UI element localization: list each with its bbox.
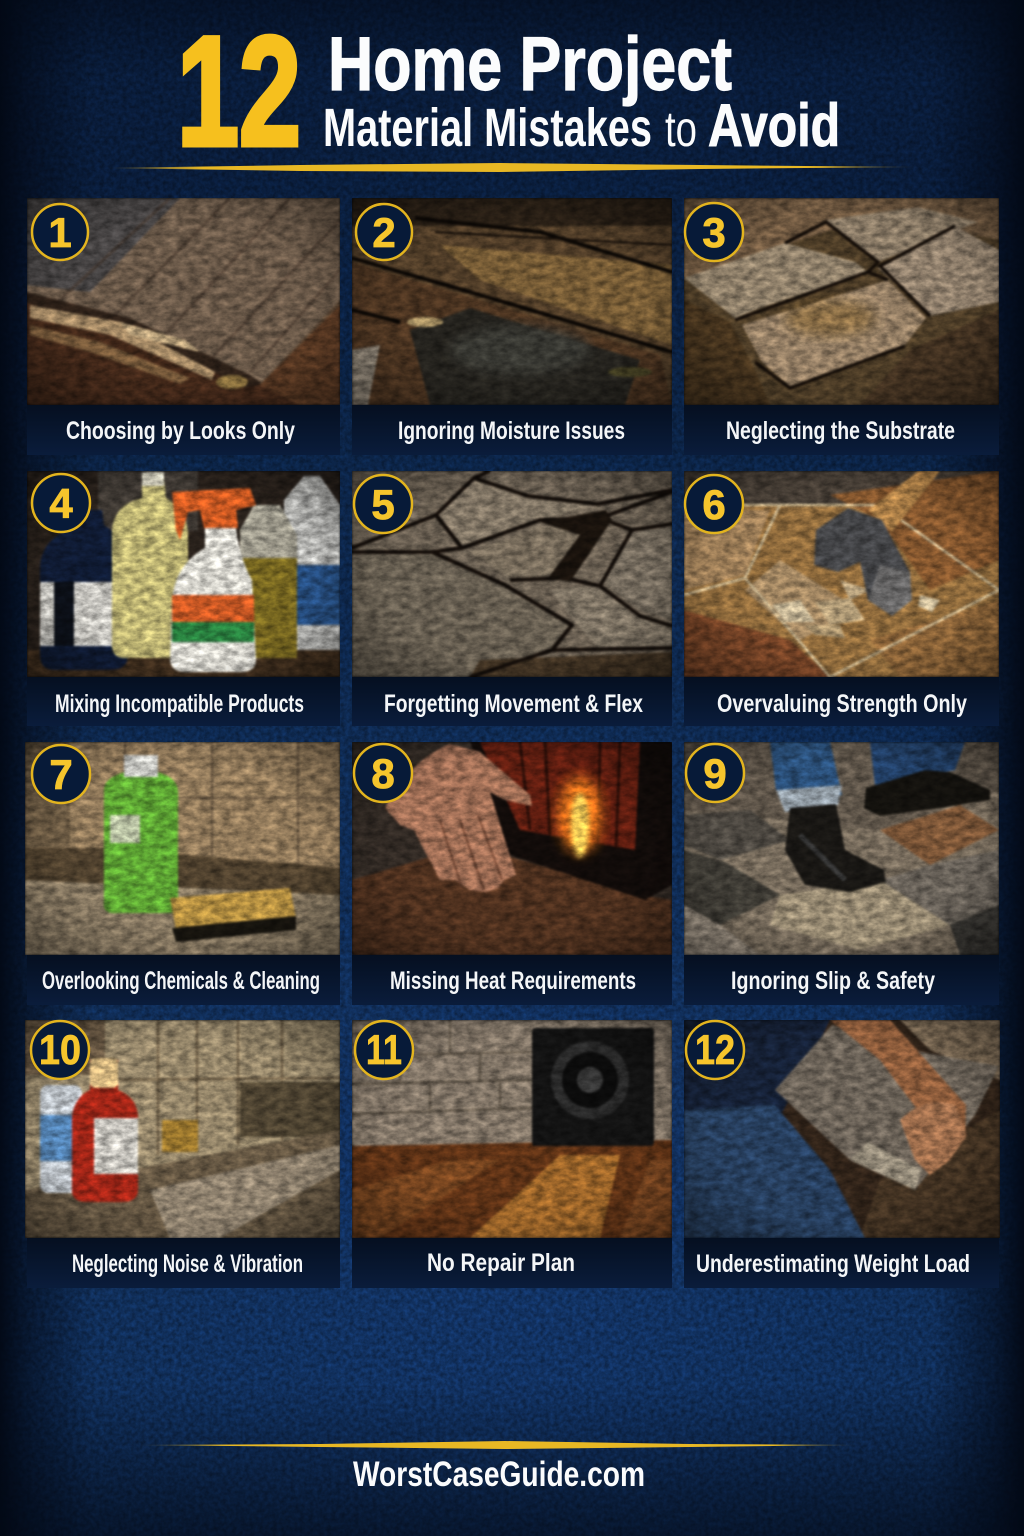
caption band <box>27 1238 340 1288</box>
caption band <box>684 677 999 726</box>
number badge 8 <box>354 744 412 802</box>
header gold divider <box>105 163 920 172</box>
caption band <box>27 405 340 455</box>
panel 4: Mixing Incompatible Products <box>27 471 340 726</box>
number badge 3: 3 <box>702 209 726 256</box>
title <box>177 5 840 179</box>
photo: water-damaged wood floor <box>352 198 672 405</box>
number badge 6: 6 <box>702 481 726 528</box>
number badge 12 <box>686 1021 744 1079</box>
caption text: Choosing by Looks Only <box>66 417 295 445</box>
photo: stained tiles and red bottle <box>25 1020 340 1238</box>
photo: broken stone slabs <box>684 198 999 405</box>
number badge 6 <box>685 475 743 533</box>
number badge 2 <box>356 204 412 260</box>
caption text: Missing Heat Requirements <box>390 967 636 995</box>
title number 12: 12 <box>177 5 301 179</box>
number badge 4: 4 <box>49 480 73 527</box>
photo: lifting wood plank <box>27 198 340 405</box>
footer website: WorstCaseGuide.com <box>353 1455 645 1494</box>
number badge 7 <box>32 745 90 803</box>
number badge 10: 10 <box>39 1026 81 1073</box>
caption text: Overlooking Chemicals & Cleaning <box>42 967 320 995</box>
caption band <box>684 955 999 1005</box>
caption text: Forgetting Movement & Flex <box>384 690 643 718</box>
panel 7: Overlooking Chemicals & Cleaning <box>25 742 340 1005</box>
photo: cracked stone floor <box>352 471 672 677</box>
number badge 9: 9 <box>703 750 727 797</box>
panel 6: Overvaluing Strength Only <box>684 471 999 726</box>
number badge 5: 5 <box>371 481 395 528</box>
number badge 3 <box>685 203 743 261</box>
title line: Material Mistakes to Avoid: Material Mistakes <box>323 98 652 158</box>
caption text: Neglecting Noise & Vibration <box>72 1250 303 1278</box>
photo: boot on tile floor <box>684 742 999 955</box>
caption band <box>352 1238 672 1288</box>
photo: hammer breaking tile <box>684 471 999 677</box>
number badge 1 <box>32 204 88 260</box>
caption band <box>27 677 340 726</box>
panel 2: Ignoring Moisture Issues <box>352 198 672 455</box>
number badge 8: 8 <box>371 750 395 797</box>
title line: Material Mistakes to Avoid: to <box>665 101 697 157</box>
footer gold divider <box>135 1441 860 1449</box>
number badge 5 <box>354 475 412 533</box>
photo: speaker on wood floor <box>352 1020 672 1238</box>
panel 12: Underestimating Weight Load <box>684 1020 1000 1288</box>
caption text: Neglecting the Substrate <box>726 417 955 445</box>
number badge 11: 11 <box>366 1026 402 1073</box>
panel 8: Missing Heat Requirements <box>352 742 672 1005</box>
photo: green cleaner and sponge on counter <box>25 742 340 955</box>
number badge 11 <box>355 1021 413 1079</box>
number badge 9 <box>686 744 744 802</box>
caption band <box>352 405 672 455</box>
panel 5: Forgetting Movement & Flex <box>352 471 672 726</box>
number badge 2: 2 <box>372 209 396 256</box>
title line: Home Project: Home Project <box>328 22 732 107</box>
caption band <box>352 677 672 726</box>
photo: hand near fireplace <box>352 742 672 955</box>
caption text: No Repair Plan <box>427 1249 575 1277</box>
caption band <box>352 955 672 1005</box>
photo: chemical bottles <box>27 471 340 677</box>
panel 3: Neglecting the Substrate <box>684 198 999 455</box>
caption band <box>684 405 999 455</box>
panel 11: No Repair Plan <box>352 1020 672 1288</box>
caption text: Mixing Incompatible Products <box>55 690 304 718</box>
caption text: Ignoring Moisture Issues <box>398 417 625 445</box>
number badge 7: 7 <box>49 751 73 798</box>
number badge 1: 1 <box>48 209 72 256</box>
number badge 10 <box>31 1021 89 1079</box>
number badge 12: 12 <box>695 1026 735 1073</box>
panel 1: Choosing by Looks Only <box>27 198 340 455</box>
caption band <box>27 955 340 1005</box>
panel 10: Neglecting Noise & Vibration <box>25 1020 340 1288</box>
photo: man lifting stone slab <box>684 1020 1000 1238</box>
title line: Material Mistakes to Avoid: Avoid <box>708 92 840 159</box>
panel 9: Ignoring Slip & Safety <box>684 742 999 1005</box>
caption text: Ignoring Slip & Safety <box>731 967 935 995</box>
caption band <box>684 1238 999 1288</box>
number badge 4 <box>32 474 90 532</box>
